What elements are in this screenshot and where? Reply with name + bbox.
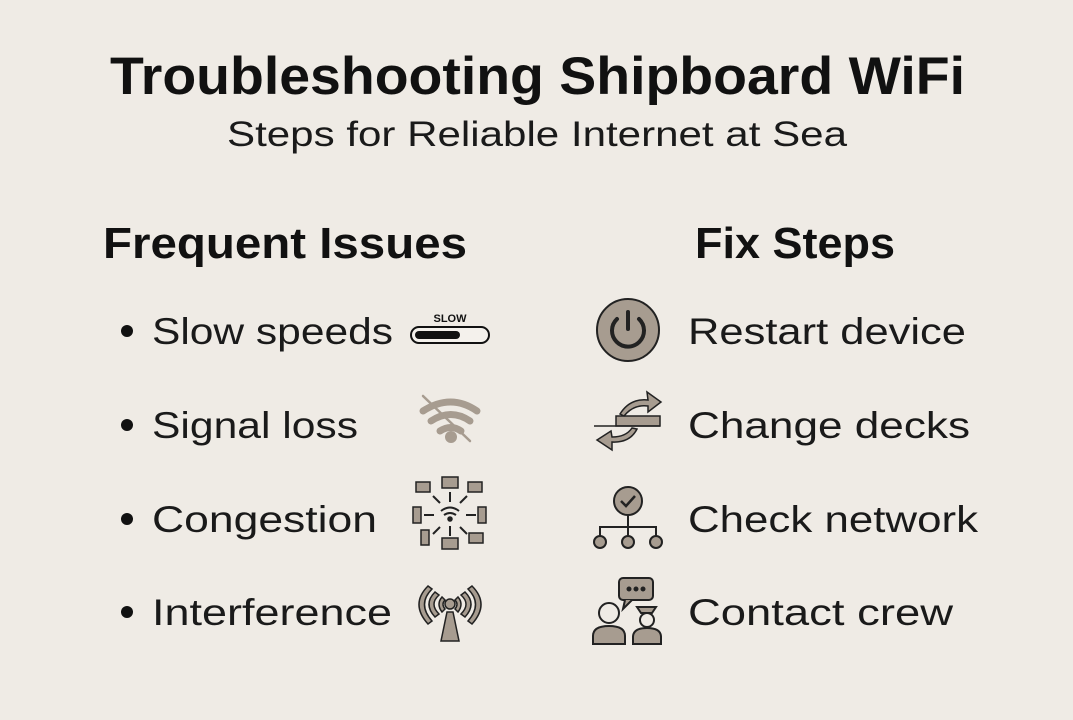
list: issues: Interference [152,592,392,633]
icon: check network [594,487,662,548]
icon: slow bar [411,313,489,343]
icon: slow bar: SLOW [434,313,467,325]
list: issues: Congestion [152,499,377,540]
list: issues [121,311,393,633]
icon: change decks [594,392,661,450]
icon: power [597,299,659,361]
list: fix steps: Change decks [688,405,970,446]
icon: congestion [413,477,486,549]
heading: Frequent Issues: Frequent Issues [103,219,467,268]
subtitle: Steps for Reliable Internet at Sea [227,115,848,154]
list: fix steps: Check network [688,499,979,540]
icon: interference [419,586,481,641]
list: issues: Slow speeds [152,311,393,352]
list: fix steps: Restart device [688,311,966,352]
icon: contact crew [593,578,661,644]
title: Troubleshooting Shipboard WiFi [110,47,965,106]
list: fix steps: Contact crew [688,592,953,633]
list: issues: Signal loss [152,405,358,446]
list: fix steps [688,311,979,633]
icon: signal loss [423,396,477,443]
heading: Fix Steps: Fix Steps [695,219,895,268]
